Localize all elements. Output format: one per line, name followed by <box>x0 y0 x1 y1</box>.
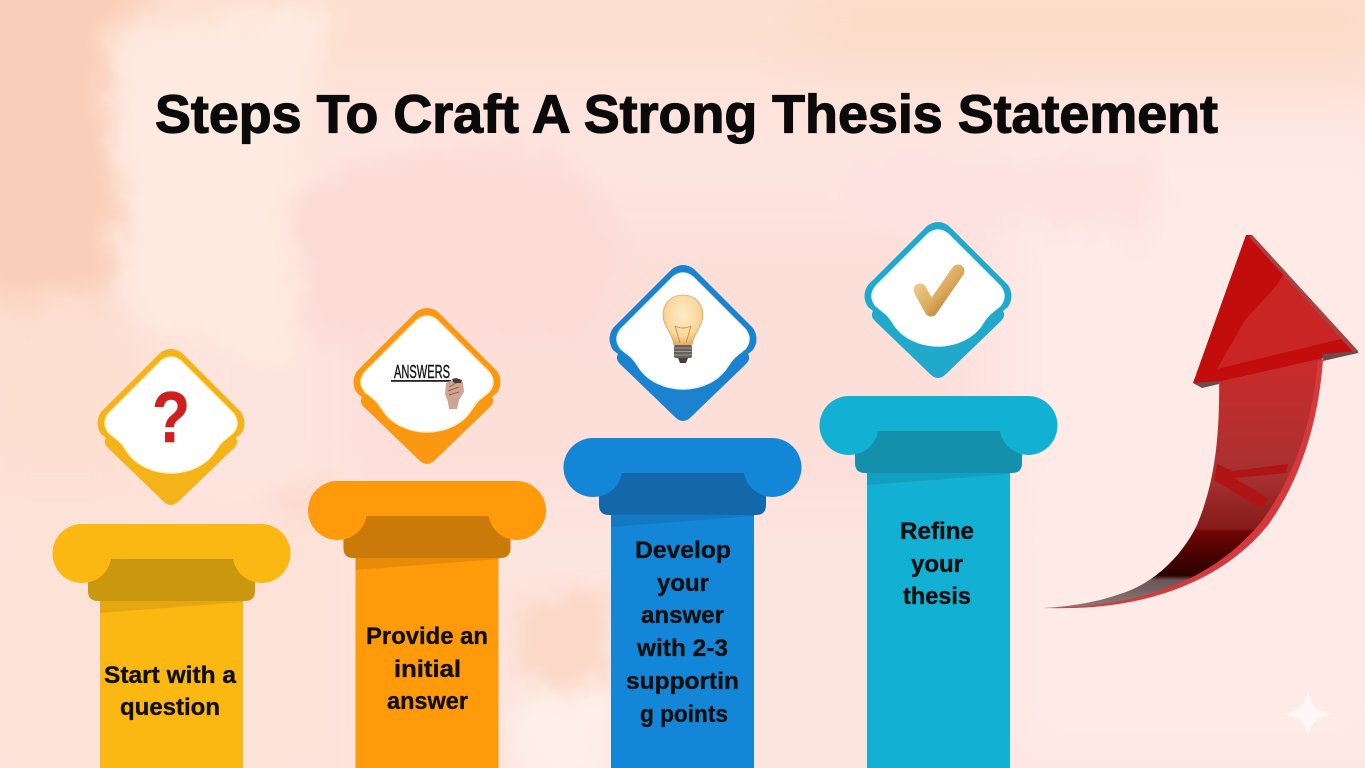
icon badge: light bulb <box>610 265 756 421</box>
step 4: refine your thesis <box>820 222 1058 768</box>
label 2: initial <box>394 656 461 683</box>
label 3: supportin <box>626 668 739 695</box>
label 3: with 2-3 <box>636 635 728 662</box>
pillar 1 <box>52 524 290 768</box>
label 3: Develop <box>635 537 731 564</box>
arrow head <box>1193 235 1358 386</box>
shaft highlight bands <box>1214 464 1288 509</box>
answers word: ANSWERS <box>394 362 450 382</box>
pillar 4 <box>820 396 1058 768</box>
label 4: Refine <box>900 518 974 545</box>
label 4: thesis <box>903 583 971 610</box>
red growth arrow <box>1043 235 1358 608</box>
icon badge: answers <box>354 308 500 464</box>
label 4 <box>900 518 974 610</box>
pillar 3 <box>564 438 802 768</box>
question mark glyph: ? <box>152 378 190 458</box>
label 1: question <box>120 694 220 721</box>
arrow shaft <box>1043 350 1323 608</box>
step 3: develop your answer <box>564 265 802 768</box>
label 2 <box>366 623 488 715</box>
label 2: answer <box>387 688 468 715</box>
check mark <box>920 271 958 310</box>
icon badge: question mark <box>98 349 244 505</box>
label 2: Provide an <box>366 623 488 650</box>
arrow head edge <box>1249 235 1358 353</box>
arrow head lit facet <box>1217 272 1345 369</box>
icon badge: gold check mark <box>864 222 1012 378</box>
label 1: Start with a <box>104 662 237 689</box>
bulb <box>663 295 703 363</box>
label 3: your <box>657 570 709 597</box>
sparkle watermark <box>1283 690 1333 738</box>
label 3: g points <box>640 701 728 728</box>
title: Steps To Craft A Strong Thesis Statement <box>155 84 1218 144</box>
hand with marker <box>445 378 464 409</box>
label 1 <box>104 662 237 721</box>
step 1: start with a question <box>52 349 290 768</box>
step 2: provide an initial answer <box>308 308 546 768</box>
pillar 2 <box>308 481 546 768</box>
arrow head underside <box>1193 351 1358 388</box>
label 4: your <box>911 551 963 578</box>
arrow shaft rim <box>1052 360 1323 608</box>
label 3 <box>626 537 739 728</box>
label 3: answer <box>641 602 724 629</box>
